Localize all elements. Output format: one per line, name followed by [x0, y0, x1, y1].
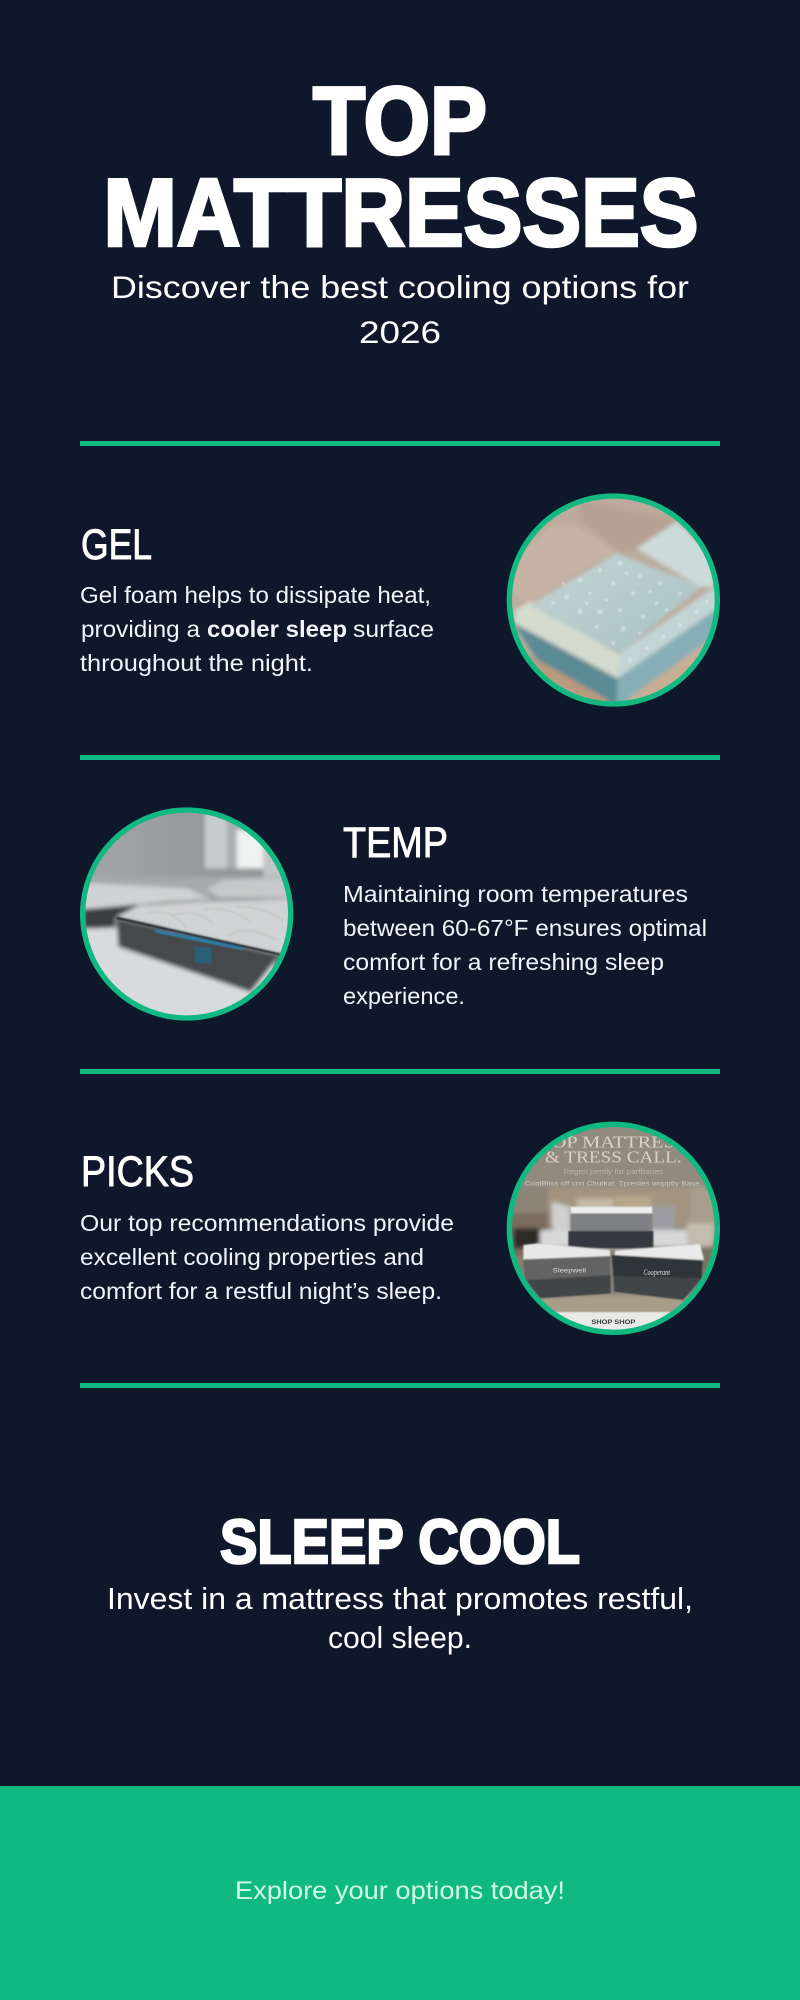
call to action text: Explore your options today!: [235, 1877, 565, 1905]
title: MATTRESSES: [104, 160, 698, 266]
text block: temp description: between 60-67°F ensures optimal: [343, 915, 707, 941]
heading: temp: TEMP: [343, 819, 448, 867]
closing text: cool sleep.: [328, 1621, 472, 1655]
text block: temp description: Maintaining room temperatures: [343, 881, 688, 907]
text block: picks description: [80, 1210, 454, 1304]
subtitle: 2026: [359, 314, 441, 350]
text block: gel description: surface: [353, 616, 434, 642]
text block: gel description: providing a: [81, 616, 201, 642]
text block: gel description: cooler sleep: [207, 616, 347, 642]
image: mattress showroom advert: OP MATTRES: [552, 1132, 675, 1151]
closing heading: SLEEP COOL: [220, 1508, 580, 1577]
image: mattress showroom advert: CoolBliss off con Chutkat. Tprestes wopptly Base.: [525, 1180, 702, 1187]
subtitle: [111, 269, 689, 350]
heading: picks: PICKS: [81, 1148, 194, 1196]
image: mattress showroom advert: [506, 1122, 720, 1335]
image: mattress showroom advert: Sleepwell: [553, 1268, 587, 1275]
subtitle: Discover the best cooling options for: [111, 269, 689, 305]
text block: temp description: experience.: [343, 983, 465, 1009]
image: mattress in bright room: [77, 807, 297, 1028]
text block: picks description: comfort for a restful night’s sleep.: [80, 1278, 442, 1304]
text block: gel description: [80, 582, 434, 676]
panel: temp: [77, 807, 707, 1028]
image: mattress showroom advert: Cooperant: [643, 1267, 670, 1277]
closing text: [107, 1582, 693, 1655]
text block: temp description: [343, 881, 707, 1009]
image: mattress showroom advert: & TRESS CALL.: [545, 1148, 682, 1167]
image: mattress showroom advert: Regen pently for partbanes: [563, 1167, 664, 1176]
text block: picks description: Our top recommendations provide: [80, 1210, 454, 1236]
title: [104, 68, 698, 266]
image: gel foam mattress layer: [506, 493, 720, 707]
text block: gel description: throughout the night.: [80, 650, 313, 676]
closing text: Invest in a mattress that promotes restful,: [107, 1582, 693, 1616]
text block: temp description: comfort for a refreshing sleep: [343, 949, 664, 975]
heading: gel: GEL: [81, 521, 152, 569]
title: TOP: [313, 68, 487, 174]
call to action band: [0, 1786, 800, 2000]
text block: gel description: Gel foam helps to dissipate heat,: [80, 582, 431, 608]
text block: picks description: excellent cooling properties and: [80, 1244, 424, 1270]
panel: gel: [80, 487, 727, 713]
image: mattress showroom advert: SHOP SHOP: [591, 1320, 635, 1326]
panel: picks: [80, 1117, 727, 1343]
